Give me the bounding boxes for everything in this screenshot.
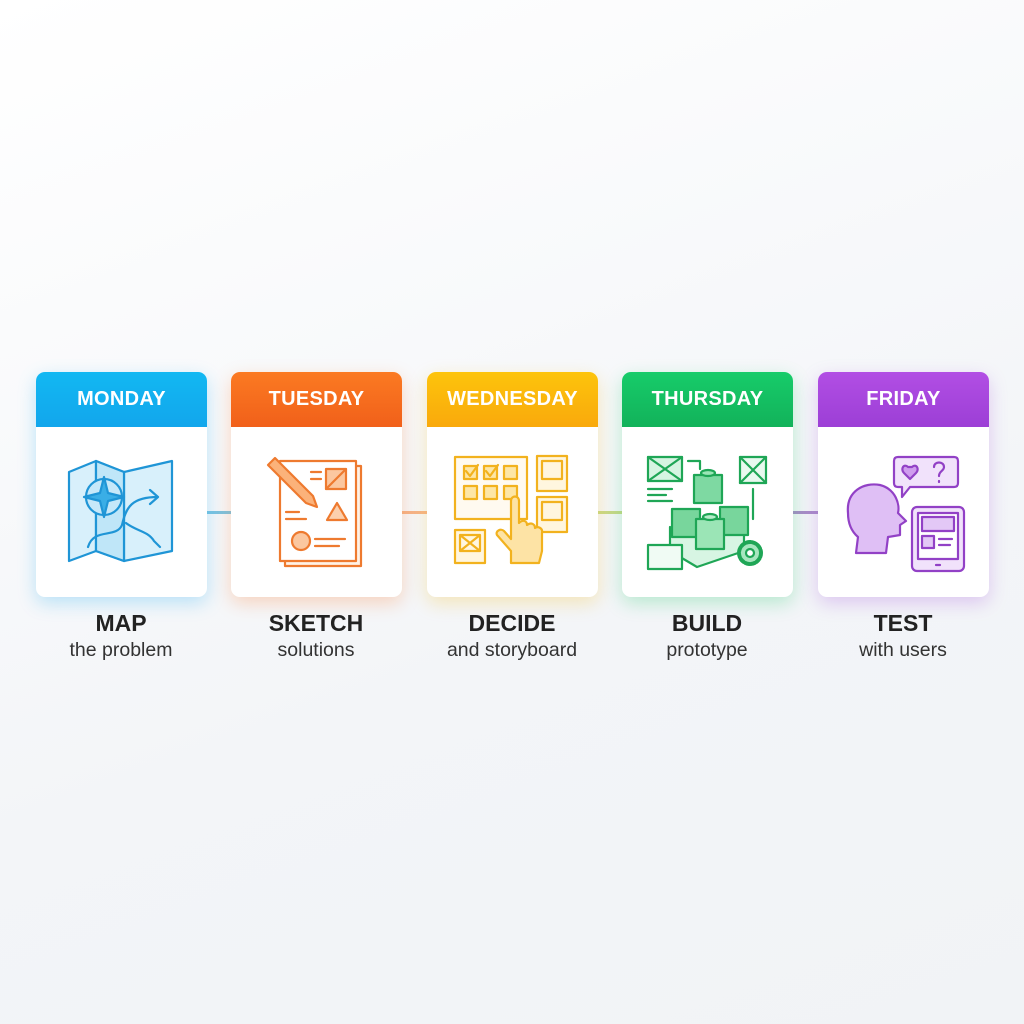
card: friday — [818, 372, 989, 597]
connector: wed-thu — [597, 511, 623, 514]
label: test: TEST — [874, 610, 932, 636]
icon: map — [68, 460, 174, 562]
card: monday — [36, 372, 207, 597]
label: sketch: SKETCH — [269, 610, 363, 636]
connector: tue-wed — [401, 511, 427, 514]
connector: mon-tue — [206, 511, 232, 514]
label: sketch: solutions — [278, 639, 354, 661]
icon: sketch — [266, 456, 362, 568]
card: friday: FRIDAY — [866, 388, 941, 410]
label: test: with users — [859, 639, 947, 661]
icon: build — [646, 456, 768, 570]
card: monday: MONDAY — [77, 388, 166, 410]
icon: decide — [454, 454, 568, 564]
card: tuesday: TUESDAY — [269, 388, 364, 410]
label: map: MAP — [95, 610, 147, 636]
card: tuesday — [231, 372, 402, 597]
label: map — [70, 610, 172, 661]
label: map: the problem — [70, 639, 172, 661]
label: build: prototype — [666, 639, 748, 661]
card: wednesday: WEDNESDAY — [447, 388, 578, 410]
label: build — [666, 610, 748, 661]
connector: thu-fri — [792, 511, 818, 514]
card: thursday: THURSDAY — [652, 388, 763, 410]
label: sketch — [269, 610, 363, 661]
label: test — [859, 610, 947, 661]
card: thursday — [622, 372, 793, 597]
label: decide: DECIDE — [469, 610, 555, 636]
label: build: BUILD — [672, 610, 742, 636]
icon: test — [846, 456, 966, 572]
label: decide — [447, 610, 577, 661]
label: decide: and storyboard — [447, 639, 577, 661]
card: wednesday — [427, 372, 598, 597]
